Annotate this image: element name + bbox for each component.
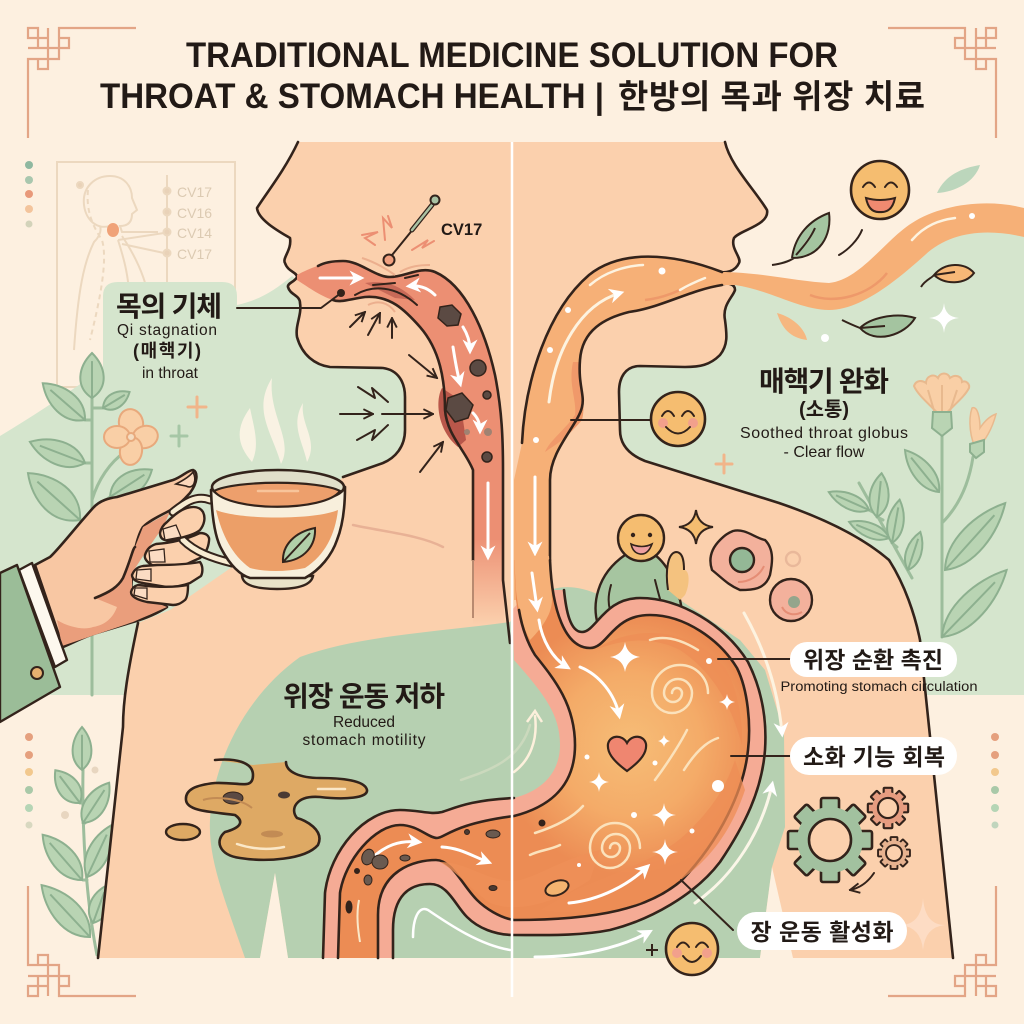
label: reduced motility xyxy=(283,681,445,749)
label: soothed throat: - Clear flow xyxy=(784,444,865,461)
stomach swirls and arrows xyxy=(357,573,718,942)
body: left half xyxy=(98,142,513,958)
stomach green area xyxy=(210,587,785,958)
label: intestinal activation xyxy=(681,880,907,950)
callout: throat stagnation: (매핵기) xyxy=(133,341,201,361)
label: reduced motility: Reduced xyxy=(333,714,395,731)
title xyxy=(100,36,925,116)
palm shadow xyxy=(57,512,170,646)
white flow arrows in throat xyxy=(320,278,488,556)
tea body xyxy=(216,510,338,571)
body: right half xyxy=(512,142,953,958)
face and body outlines xyxy=(98,142,953,958)
stomach: pink wall outline xyxy=(323,590,765,958)
finger nails xyxy=(134,549,165,599)
label: digestive recovery: 소화 기능 회복 xyxy=(803,744,945,770)
tea surface xyxy=(214,483,340,507)
label: promoting stomach circulation xyxy=(718,642,978,694)
hand palm xyxy=(35,470,196,647)
icon: gears xyxy=(788,788,910,890)
panel: acupoint chart xyxy=(57,162,235,387)
title: 한방의 목과 위장 치료 xyxy=(618,78,925,115)
herb plant: upper left xyxy=(18,353,158,695)
label: reduced motility: 위장 운동 저하 xyxy=(283,681,445,712)
herb plant: right flowers xyxy=(826,374,1016,646)
clavicle line xyxy=(353,525,443,547)
thumb nail xyxy=(176,472,195,487)
decorative dots bottom left xyxy=(25,733,33,828)
title: THROAT & STOMACH HEALTH | xyxy=(100,77,604,116)
acupoint labels: CV16 xyxy=(177,205,212,221)
residue in stomach and intestine xyxy=(346,820,571,913)
icon: gold sparkle xyxy=(679,510,713,544)
acupoint labels xyxy=(177,184,212,262)
label: reduced motility: stomach motility xyxy=(302,732,426,749)
acupoint labels: CV14 xyxy=(177,225,212,241)
cup handle xyxy=(173,498,232,563)
stomach: pink wall xyxy=(323,590,765,958)
icon: peach flower xyxy=(104,406,161,467)
stagnation blockages xyxy=(438,305,492,462)
decorative dots top left xyxy=(25,161,33,228)
stomach colour swirls xyxy=(440,633,745,913)
label: soothed throat: Soothed throat globus xyxy=(740,425,908,442)
callout: throat stagnation xyxy=(116,289,345,382)
hand crease xyxy=(95,547,135,598)
title: TRADITIONAL MEDICINE SOLUTION FOR xyxy=(186,36,838,75)
label: soothed throat: (소통) xyxy=(799,398,849,421)
icon: smiling face on throat xyxy=(571,392,705,446)
tea cup and hand xyxy=(0,470,345,722)
esophagus: stagnant throat xyxy=(297,261,510,643)
tea leaf icon xyxy=(283,528,315,562)
sparkles: plus signs xyxy=(171,397,732,473)
cup body xyxy=(211,476,345,578)
pressure arrows xyxy=(340,312,443,472)
cuff xyxy=(19,563,67,667)
upper throat flow right xyxy=(514,203,1024,600)
label: intestinal activation: 장 운동 활성화 xyxy=(750,919,894,945)
center divider xyxy=(511,142,513,997)
icon: laughing face xyxy=(851,161,909,219)
pinky finger xyxy=(131,585,188,605)
decorative dots bottom right xyxy=(991,733,999,828)
acupuncture needle xyxy=(362,196,440,312)
label: soothed throat xyxy=(740,366,908,461)
icon: healthy cells xyxy=(710,530,812,621)
cuff button xyxy=(31,667,43,679)
steam xyxy=(240,378,311,464)
callout: throat stagnation: Qi stagnation xyxy=(117,322,217,339)
faint star xyxy=(900,898,945,950)
panel: right light green xyxy=(610,217,1024,695)
stagnant food puddle xyxy=(166,760,367,860)
tea highlight xyxy=(258,490,298,492)
stomach: inner orange xyxy=(338,560,749,958)
cup rim xyxy=(212,470,344,504)
icon: bottom smiling face xyxy=(646,923,718,975)
icon: thumbs-up person xyxy=(596,515,689,625)
outside flow arrows xyxy=(413,613,782,957)
label: soothed throat: 매핵기 완화 xyxy=(759,366,889,397)
label: CV17: CV17 xyxy=(441,221,482,239)
ring finger xyxy=(132,562,202,587)
label: promoting stomach circulation: Promoting stomach circulation xyxy=(780,679,978,694)
callout: throat stagnation: 목의 기체 xyxy=(116,291,222,322)
label: promoting stomach circulation: 위장 순환 촉진 xyxy=(803,647,943,673)
sleeve xyxy=(0,565,60,722)
cup saucer foot xyxy=(242,576,313,589)
stomach upper tube join xyxy=(514,556,552,640)
loose leaves xyxy=(772,165,980,340)
index finger xyxy=(160,507,204,540)
panel: left light green xyxy=(0,276,440,695)
cream notches at bottom xyxy=(260,867,793,958)
herb plant: lower left xyxy=(32,727,120,955)
acupoint labels: CV17 xyxy=(177,246,212,262)
sparkles in stomach xyxy=(577,303,959,867)
icon: heart xyxy=(608,737,646,771)
middle finger xyxy=(145,533,209,567)
callout: throat stagnation: in throat xyxy=(142,365,199,382)
acupoint labels: CV17 xyxy=(177,184,212,200)
label: digestive recovery xyxy=(731,737,957,775)
stomach: inner outline xyxy=(338,560,749,958)
